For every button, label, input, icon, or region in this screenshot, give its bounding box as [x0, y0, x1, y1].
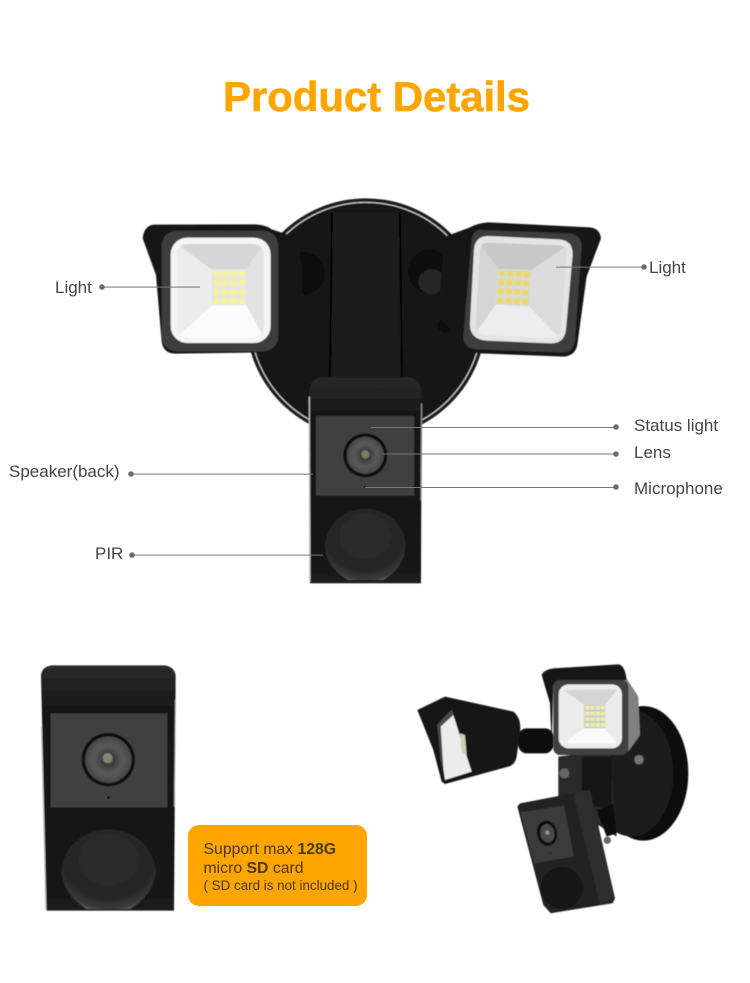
label: Speaker(back): [9, 462, 313, 481]
LED array: [496, 269, 532, 306]
angled camera: [517, 790, 615, 913]
title: Product Details: [223, 73, 530, 120]
left light: [143, 224, 302, 354]
main product: front view floodlight camera: [143, 198, 601, 583]
camera close-up: [41, 665, 176, 911]
camera body: [309, 378, 422, 583]
wall mount disc: [246, 198, 486, 438]
right light: [438, 222, 601, 357]
label: Light right: Light: [649, 258, 686, 277]
label: Lens: [383, 443, 671, 462]
angled product view: [417, 664, 688, 913]
LED array: [212, 269, 246, 305]
SD card callout: micro SD card: [204, 860, 304, 877]
label: PIR: [95, 544, 323, 563]
label: Status light: Status light: [634, 416, 718, 435]
label: Light right: [556, 258, 686, 277]
right light: [542, 664, 640, 755]
disc mount: [558, 706, 688, 844]
label: Microphone: [365, 479, 723, 498]
callout lines and labels: [9, 258, 723, 563]
left light arm and hood: [417, 697, 553, 784]
label: Light left: [55, 278, 200, 297]
label: Status light: [371, 416, 718, 435]
SD card callout: Support max 128G: [204, 841, 336, 858]
SD card callout: ( SD card is not included ): [204, 878, 358, 893]
label: Speaker(back): Speaker(back): [9, 462, 120, 481]
label: Light left: Light: [55, 278, 92, 297]
label: Lens: Lens: [634, 443, 671, 462]
SD card callout: [188, 825, 367, 906]
label: Microphone: Microphone: [634, 479, 723, 498]
label: PIR: PIR: [95, 544, 123, 563]
